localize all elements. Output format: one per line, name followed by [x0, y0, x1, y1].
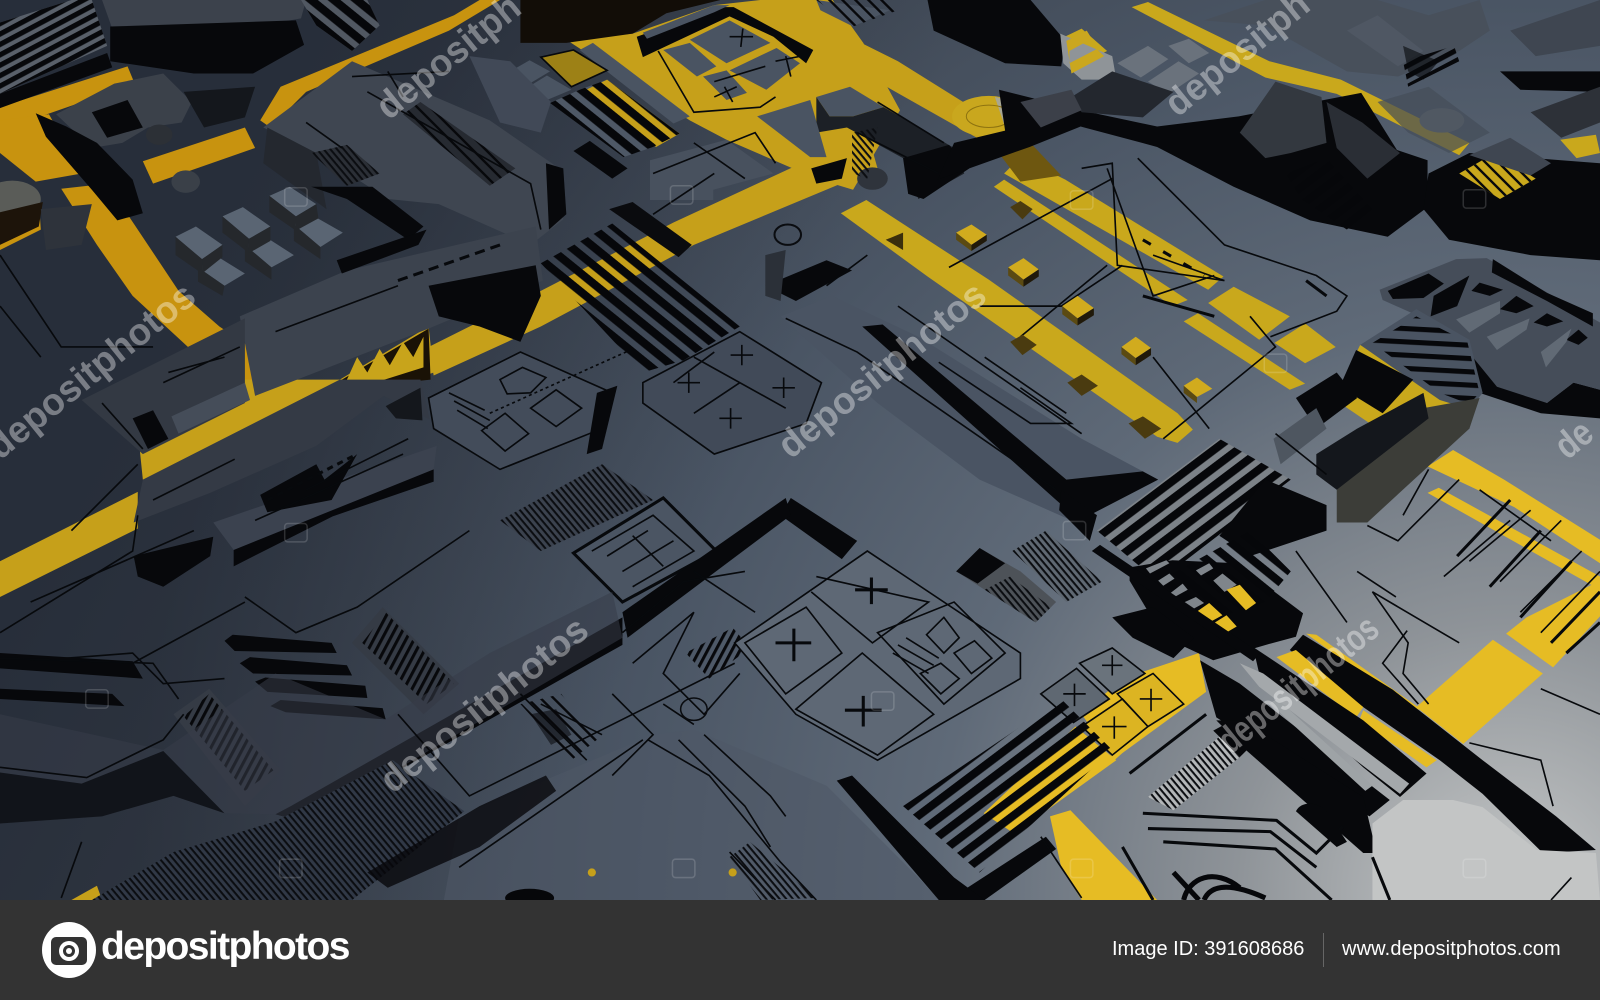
yellow traces: centre left — [0, 0, 1020, 900]
right dark block with yellow vent — [1423, 138, 1600, 260]
cube bank — [176, 187, 343, 296]
cube tops — [176, 187, 343, 286]
pad strip beside rails — [1306, 634, 1419, 713]
fine light hatch — [1130, 714, 1247, 810]
lower centre trace board — [520, 571, 755, 776]
cluster shadow — [1469, 353, 1600, 418]
under-bar black block — [429, 265, 541, 342]
stair shadow — [311, 187, 423, 240]
black comb — [781, 498, 857, 559]
top right dark cluster — [928, 0, 1428, 237]
bottom centre plate lines — [367, 730, 939, 907]
cube row one — [956, 224, 1212, 403]
yellow cubes — [886, 201, 1212, 439]
second rail — [1253, 647, 1427, 797]
grey tiles — [1146, 560, 1237, 610]
grille plate — [56, 73, 192, 148]
black mass — [36, 113, 143, 220]
slot vents — [403, 102, 515, 186]
thin lead line — [1092, 545, 1260, 661]
small grilles — [311, 145, 380, 186]
upper panel set with crosses — [469, 0, 898, 157]
bottom fine stripes — [61, 663, 735, 900]
right plate lines — [1296, 469, 1600, 806]
dark stub — [811, 158, 847, 184]
slotted vents lower left — [0, 635, 386, 719]
schematic panel with hexagons — [429, 349, 633, 469]
long black diagonal rails — [1092, 545, 1596, 853]
comb strip — [0, 53, 112, 108]
side panel — [41, 204, 92, 250]
icon: camera logo — [42, 922, 96, 978]
grey recess with dark cap — [956, 548, 1056, 622]
raised block left of coin — [757, 87, 969, 199]
yellow traces: top left — [0, 0, 500, 393]
bottom plate — [837, 776, 1600, 900]
flat circuit plate lines and small parts — [653, 133, 1347, 439]
grey plate left of tiles — [469, 56, 551, 133]
yellow tiles — [1196, 585, 1256, 634]
key shaped socket — [774, 224, 801, 245]
raised plate — [102, 0, 306, 29]
left tiles — [510, 60, 550, 84]
top-centre dark mass — [520, 0, 720, 43]
cross tile one — [690, 20, 770, 63]
diagonal black ledge — [276, 498, 791, 822]
recess holes — [1388, 273, 1588, 345]
tiles with crosses on yellow — [1041, 648, 1184, 755]
hatched stripes with yellow — [541, 223, 740, 372]
small cubes — [1010, 201, 1033, 219]
coin — [952, 96, 1026, 137]
dotted panel — [816, 0, 890, 27]
yellow traces: long diagonal bands — [841, 2, 1600, 454]
rail junction black mass with tiles — [1130, 531, 1303, 660]
dark comb — [964, 837, 1056, 900]
right mechanical cluster — [1360, 258, 1600, 418]
grey trace strip — [580, 43, 690, 123]
watermark camera marks — [86, 186, 1486, 878]
light slit — [1269, 699, 1372, 791]
black framed bar — [637, 7, 813, 63]
round stud — [146, 124, 172, 145]
grey strip — [1240, 663, 1409, 794]
hatch with grey underlay: cross schematic — [500, 464, 716, 602]
big cross panel — [735, 551, 1020, 760]
watermark: lower centre: depositphotos — [371, 608, 596, 801]
shadow on yellow band — [995, 138, 1061, 182]
black dotted bar — [1492, 259, 1593, 327]
lower dark bar cluster — [134, 380, 437, 587]
schematic tile — [663, 43, 716, 77]
hatch vent — [0, 0, 107, 94]
round drum — [0, 181, 41, 217]
footer bar — [0, 900, 1600, 1000]
stripe vent — [550, 80, 680, 157]
long raised panel, centre right — [781, 296, 1158, 520]
dark junction stub — [1112, 607, 1194, 658]
cross tile two — [730, 48, 800, 90]
black slot — [573, 141, 628, 179]
black hatch bridge — [1059, 439, 1327, 582]
top right upper panels — [1204, 0, 1600, 153]
striped grille lower — [173, 689, 281, 806]
website: www.depositphotos.com — [1342, 938, 1561, 960]
logo wordmark: depositphotos — [101, 925, 349, 968]
top left machinery — [0, 0, 380, 250]
divider — [1323, 933, 1324, 967]
lower left raised plate — [0, 592, 622, 823]
watermark: lower right: depositphotos — [1209, 606, 1386, 761]
cross tile cluster — [643, 332, 821, 454]
yellow traces: right side — [984, 450, 1600, 900]
upper rail — [1290, 635, 1596, 853]
cube sides — [176, 196, 320, 296]
black hatch strip — [903, 699, 1112, 872]
mid-left trace lines — [0, 255, 469, 684]
image id: Image ID: 391608686 — [1112, 938, 1304, 960]
dark box on yellow, right — [1273, 350, 1480, 522]
small schematic — [1012, 531, 1102, 602]
third rail — [1200, 660, 1390, 816]
notch row — [398, 245, 500, 281]
fourth rail — [1216, 720, 1377, 853]
cube tiles — [1117, 39, 1209, 94]
long raised bar with notches — [82, 227, 543, 454]
fins — [1456, 301, 1571, 367]
shadow block — [184, 87, 255, 128]
cluster base plate — [1380, 258, 1600, 403]
yellow strip segments — [1277, 650, 1363, 717]
black block — [110, 20, 304, 73]
black oblique vent — [609, 202, 692, 257]
grey plate under central band — [650, 140, 773, 200]
upper central raised panel — [263, 61, 566, 245]
striped grille upper — [352, 607, 459, 714]
grey square — [703, 70, 747, 100]
striped plate — [1360, 309, 1483, 409]
vent — [301, 0, 380, 51]
watermark: centre: depositphotos — [769, 273, 994, 466]
